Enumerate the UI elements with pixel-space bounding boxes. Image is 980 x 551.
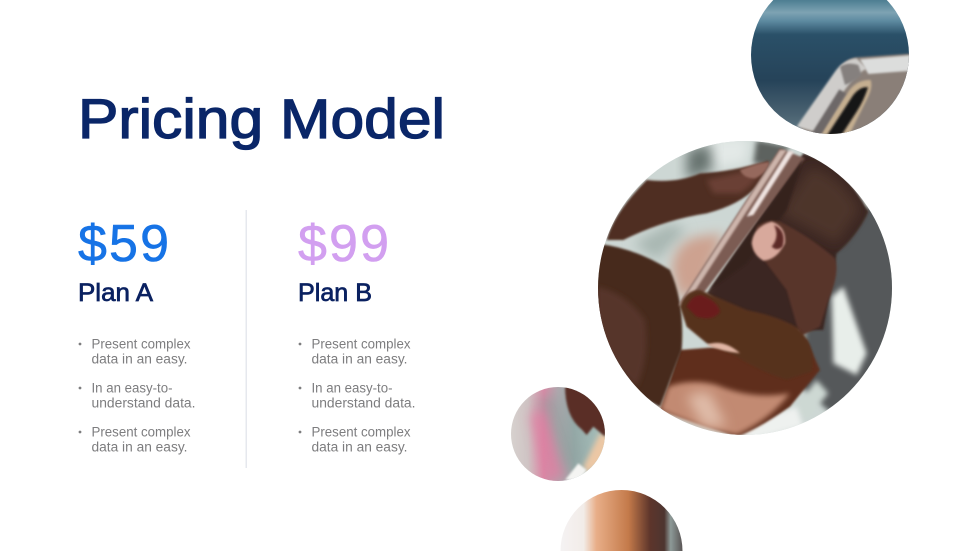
bullet list: Plan A: Present complex: [92, 424, 191, 440]
bullet list: Plan B: understand data.: [312, 396, 416, 410]
title: Pricing Model: [78, 87, 445, 150]
panel: Plan B: [298, 215, 416, 454]
bullet list: Plan A: data in an easy.: [92, 352, 188, 366]
middle finger: [680, 290, 813, 380]
bullet list: Plan B: [299, 336, 416, 454]
bullet list: Plan A: Present complex: [92, 336, 191, 352]
bullet list: Plan B: Present complex: [312, 336, 411, 352]
photo circle: phone corner: [751, 0, 909, 134]
bullet list: Plan A: understand data.: [92, 396, 196, 410]
bullet list: Plan B: Present complex: [312, 424, 411, 440]
heading: Plan B: Plan B: [298, 279, 372, 307]
photo circle: hand holding phone: [598, 141, 892, 435]
bullet list: Plan B: In an easy-to-: [312, 380, 392, 396]
back of phone: [707, 153, 868, 330]
thumb: [753, 221, 836, 337]
bullet list: Plan B: data in an easy.: [312, 440, 408, 454]
price: $59: $59: [78, 215, 169, 273]
index finger: [607, 161, 769, 240]
blurred rear hand: [672, 233, 723, 300]
bullet list: Plan B: data in an easy.: [312, 352, 408, 366]
bullet list: Plan A: data in an easy.: [92, 440, 188, 454]
right dark area: [802, 205, 892, 412]
bullet list: Plan A: In an easy-to-: [92, 380, 172, 396]
photo circle: blurred skin: [558, 488, 686, 551]
heading: Plan A: Plan A: [78, 279, 153, 307]
photo circle: blurred fingertip: [511, 387, 605, 481]
phone edge: [678, 148, 805, 305]
palm and wrist: [660, 340, 820, 437]
price: $99: $99: [298, 215, 389, 273]
bullet list: Plan A: [79, 336, 196, 454]
panel: Plan A: [78, 215, 196, 454]
blurred background stripes: [706, 141, 750, 170]
left hand: [593, 243, 682, 407]
